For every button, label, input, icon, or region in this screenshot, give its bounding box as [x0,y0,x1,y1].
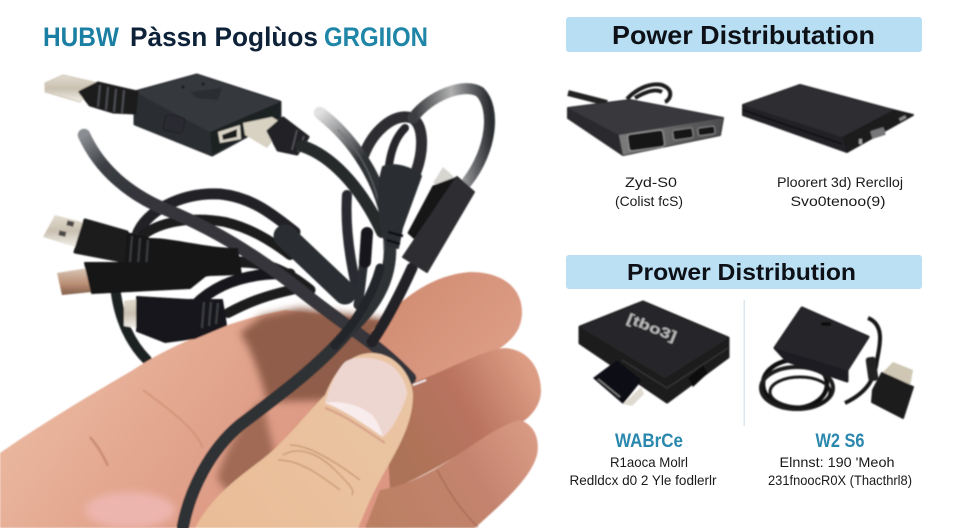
caption left: WABrCe [615,431,683,452]
cables behind the hand [115,89,490,360]
device: hub with ports [568,84,723,155]
heading top: Power Distributation [612,20,875,50]
caption left: Redldcx d0 2 Yle fodlerlr [570,472,717,488]
title [43,22,428,52]
title: Pàssn Poglùos [130,22,318,52]
caption left: R1aoca Molrl [610,454,688,470]
device: black hub with plug [580,302,728,406]
caption right [777,174,903,209]
caption right: Ploorert 3d) Rerclloj [777,174,903,190]
loop ferrite [379,165,421,248]
caption right: Svo0tenoo(9) [790,193,886,209]
caption right: 231fnoocR0X (Thacthrl8) [768,472,912,488]
device: slim enclosure [743,85,913,152]
panel: power distribution top [566,17,922,209]
micro plug lower [124,297,226,342]
thumb [195,353,413,528]
caption left [570,431,717,488]
heading bottom: Prower Distribution [627,259,856,285]
ferrite on long strand [285,236,345,293]
caption left: (Colist fcS) [615,193,683,209]
finger one [372,272,522,395]
heading bar top [566,17,922,52]
usb plug left [43,215,242,278]
photo: hand holding hub and cables [0,75,541,528]
heading bar bottom [566,255,922,289]
device: hub with coiled cable [761,308,913,418]
usb-c plug left [57,263,205,295]
title: HUBW [43,22,119,52]
panel: power distribution bottom [566,255,922,488]
thumbnail [325,358,407,437]
device label: [tbo3] [625,310,679,344]
usb-c connector on right [403,167,474,272]
caption right [768,431,912,488]
thin gap highlight between fingers [413,380,426,385]
title: GRGIION [324,22,428,52]
caption left: Zyd-S0 [625,174,677,190]
caption right: W2 S6 [816,431,864,452]
caption left [615,174,683,209]
finger two [385,348,541,490]
palm [0,310,425,528]
usb plug top left [45,75,137,113]
cable tangle [84,113,412,526]
hub side connector and cable [243,117,382,232]
hub main unit [135,75,280,155]
finger three [365,420,538,528]
caption right: Elnnst: 190 'Meoh [780,454,894,470]
